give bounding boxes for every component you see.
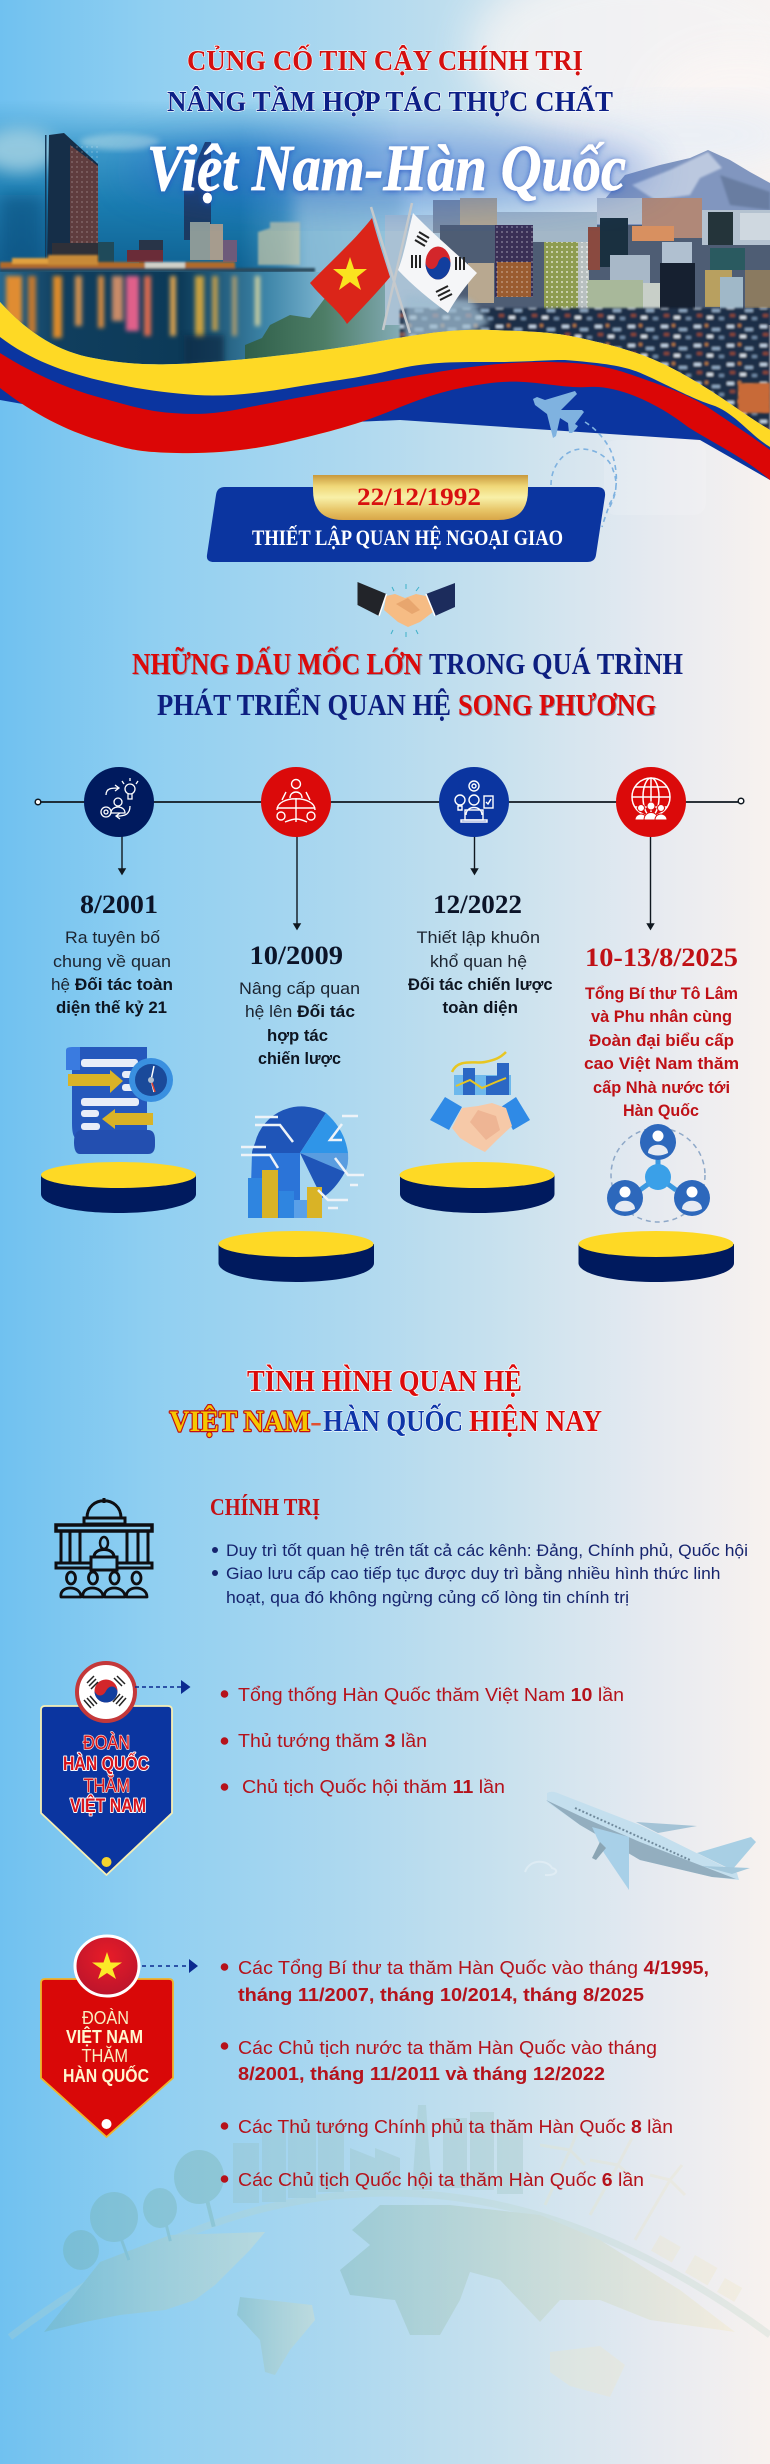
heading: milestones: NHỮNG DẤU MỐC LỚN: [132, 645, 422, 681]
milestone text: 10-13/8/2025: Tổng Bí thư Tô Lâm: [585, 984, 738, 1003]
icon: pie chart with bars: [241, 1106, 364, 1218]
banner caption: THIẾT LẬP QUAN HỆ NGOẠI GIAO: [252, 525, 563, 550]
background world map watermark: [10, 2105, 770, 2397]
hill: [245, 283, 402, 359]
date box: [207, 475, 605, 562]
milestone text: 10-13/8/2025: cấp Nhà nước tới: [593, 1078, 730, 1097]
podium 3: [400, 1162, 554, 1213]
Vietnamese visits list: Các Chủ tịch nước ta thăm Hàn Quốc vào tháng: [238, 2038, 657, 2058]
milestone text: 10-13/8/2025: cao Việt Nam thăm: [584, 1054, 739, 1073]
blue banner: [207, 487, 605, 562]
date: 22/12/1992: [357, 484, 481, 511]
heading: milestones: SONG PHƯƠNG: [459, 688, 657, 723]
milestone text: 8/2001: Ra tuyên bố: [65, 928, 161, 947]
blue badge shape: [41, 1706, 172, 1875]
milestone text: 10-13/8/2025: và Phu nhân cùng: [591, 1007, 732, 1026]
airplane illustration: [546, 1792, 756, 1890]
header ribbon: [0, 302, 770, 480]
icon: people network: [607, 1124, 710, 1222]
Korean visits list: [221, 1685, 624, 1797]
milestone text: 12/2022: Thiết lập khuôn: [416, 928, 540, 947]
icon: Vietnamese flag button: [75, 1936, 139, 1996]
milestone text: 10-13/8/2025: 10-13/8/2025: [585, 943, 738, 972]
title glow: [125, 132, 655, 208]
heading: current relations: HÀN QUỐC: [323, 1402, 463, 1438]
milestone text: 8/2001: hệ Đối tác toàn: [51, 975, 173, 994]
milestone text: 10/2009: [239, 941, 360, 1068]
badge label: ĐOÀN: [82, 2007, 129, 2028]
flags: [310, 203, 477, 333]
right city: [385, 198, 770, 325]
icon: document scroll with clock: [66, 1047, 173, 1154]
podium 2: [218, 1231, 374, 1282]
podium 4: [578, 1231, 734, 1282]
milestone icon 4: [616, 767, 686, 837]
milestone text: 10-13/8/2025: [584, 943, 739, 1120]
politics text block: [210, 1495, 748, 1607]
milestone text: 8/2001: chung về quan: [53, 952, 171, 971]
ribbon yellow band: [0, 302, 770, 480]
shoreline lights: [0, 255, 315, 272]
milestone text: 12/2022: [408, 890, 552, 1017]
flag poles: [371, 203, 412, 333]
badge label: [63, 2007, 149, 2086]
milestone text: 10-13/8/2025: Đoàn đại biểu cấp: [589, 1031, 734, 1050]
Korean visits list: Thủ tướng thăm 3 lần: [238, 1731, 427, 1751]
timeline axis: [38, 801, 742, 803]
timeline: [35, 767, 744, 929]
heading: current relations: VIỆT NAM: [170, 1405, 310, 1438]
water: [0, 272, 324, 364]
mountain: [597, 150, 770, 225]
heading: milestones: NHỮNG DẤU MỐC LỚN: [133, 646, 423, 682]
milestone text: 8/2001: diện thế kỷ 21: [56, 998, 167, 1017]
badge: Vietnamese delegation: [41, 1936, 198, 2137]
badge label: VIỆT NAM: [70, 1795, 146, 1817]
Vietnamese visits list: Các Chủ tịch Quốc hội ta thăm Hàn Quốc 6 lần: [238, 2170, 644, 2190]
dashed arrow: [142, 1959, 198, 1973]
title line 2: NÂNG TẦM HỢP TÁC THỰC CHẤT: [167, 84, 613, 118]
badge label: HÀN QUỐC: [63, 1753, 149, 1775]
milestone icon 2: [261, 767, 331, 837]
heading: milestones: TRONG QUÁ TRÌNH: [429, 646, 683, 681]
Vietnamese visits list: Các Tổng Bí thư ta thăm Hàn Quốc vào tháng 4/1995,: [238, 1958, 709, 1978]
cloud: [525, 1862, 556, 1875]
header cityscape image: [0, 0, 770, 438]
heading: milestones: PHÁT TRIỂN QUAN HỆ: [157, 687, 451, 722]
heading: current relations: [170, 1363, 602, 1438]
icon: Korean flag button: [77, 1663, 135, 1721]
ribbon blue band: [0, 337, 770, 480]
Vietnamese visits list: tháng 11/2007, tháng 10/2014, tháng 8/2025: [238, 1985, 644, 2005]
milestone text: 8/2001: [51, 890, 173, 1017]
plane icon with dashed route: [533, 391, 616, 527]
flag: South Korea: [398, 213, 477, 313]
podium 1: [41, 1162, 196, 1213]
politics bullets: Duy trì tốt quan hệ trên tất cả các kênh: Đảng, Chính phủ, Quốc hội: [226, 1541, 748, 1560]
icon: chart over handshake: [430, 1052, 530, 1152]
milestone text: 10/2009: hệ lên Đối tác: [245, 1002, 355, 1021]
distant mist and pale buildings: [286, 185, 410, 272]
dashed arrow: [135, 1680, 190, 1694]
badge label: THĂM: [82, 2045, 128, 2066]
politics bullets: Giao lưu cấp cao tiếp tục được duy trì bằng nhiều hình thức linh: [226, 1564, 720, 1583]
red badge shape: [41, 1979, 173, 2137]
heading: current relations: HIỆN NAY: [469, 1403, 602, 1438]
badge label: HÀN QUỐC: [63, 2065, 149, 2086]
heading: milestones: [132, 645, 683, 723]
icon: handshake: [358, 582, 455, 637]
left towers: [45, 133, 237, 266]
badge: Korean delegation: [41, 1663, 190, 1875]
flag: Vietnam: [310, 218, 390, 324]
ribbon red band: [0, 353, 770, 480]
milestone text: 10-13/8/2025: Hàn Quốc: [623, 1101, 699, 1120]
milestone text: 12/2022: khổ quan hệ: [430, 952, 527, 971]
milestone icon 3: [439, 767, 509, 837]
milestone arrows: [119, 836, 654, 929]
gold tab: [313, 475, 528, 520]
milestone text: 10/2009: chiến lược: [258, 1049, 341, 1068]
badge label: THĂM: [84, 1776, 130, 1797]
milestone text: 12/2022: toàn diện: [442, 998, 518, 1017]
milestone text: 10/2009: 10/2009: [250, 941, 343, 970]
heading: current relations: -: [310, 1405, 322, 1438]
title line 3: Việt Nam-Hàn Quốc: [147, 132, 626, 205]
Korean visits list: Tổng thống Hàn Quốc thăm Việt Nam 10 lần: [238, 1685, 624, 1705]
milestone text: 10/2009: Nâng cấp quan: [239, 979, 360, 998]
milestone text: 12/2022: Đối tác chiến lược: [408, 975, 552, 994]
milestone text: 12/2022: 12/2022: [433, 890, 522, 919]
icon: parliament: [56, 1498, 152, 1597]
faint panel behind date box: [604, 440, 706, 515]
milestone icon 1: [84, 767, 154, 837]
Korean visits list: Chủ tịch Quốc hội thăm 11 lần: [242, 1777, 505, 1797]
Vietnamese visits list: 8/2001, tháng 11/2011 và tháng 12/2022: [238, 2064, 605, 2084]
milestone text: 8/2001: 8/2001: [80, 890, 158, 919]
milestone text: 10/2009: hợp tác: [267, 1026, 328, 1045]
politics bullets: [212, 1541, 748, 1607]
heading: current relations: TÌNH HÌNH QUAN HỆ: [247, 1363, 522, 1398]
title line 1: CỦNG CỐ TIN CẬY CHÍNH TRỊ: [187, 43, 583, 77]
politics bullets: hoạt, qua đó không ngừng củng cố lòng tin chính trị: [226, 1588, 629, 1607]
badge label: ĐOÀN: [83, 1733, 130, 1754]
heading: milestones: SONG PHƯƠNG: [458, 687, 656, 722]
Vietnamese visits list: [221, 1958, 709, 2190]
politics heading: CHÍNH TRỊ: [210, 1495, 320, 1521]
badge label: [63, 1733, 149, 1817]
badge label: VIỆT NAM: [66, 2026, 143, 2047]
Vietnamese visits list: Các Thủ tướng Chính phủ ta thăm Hàn Quốc 8 lần: [238, 2117, 673, 2137]
left sky: [0, 104, 385, 272]
